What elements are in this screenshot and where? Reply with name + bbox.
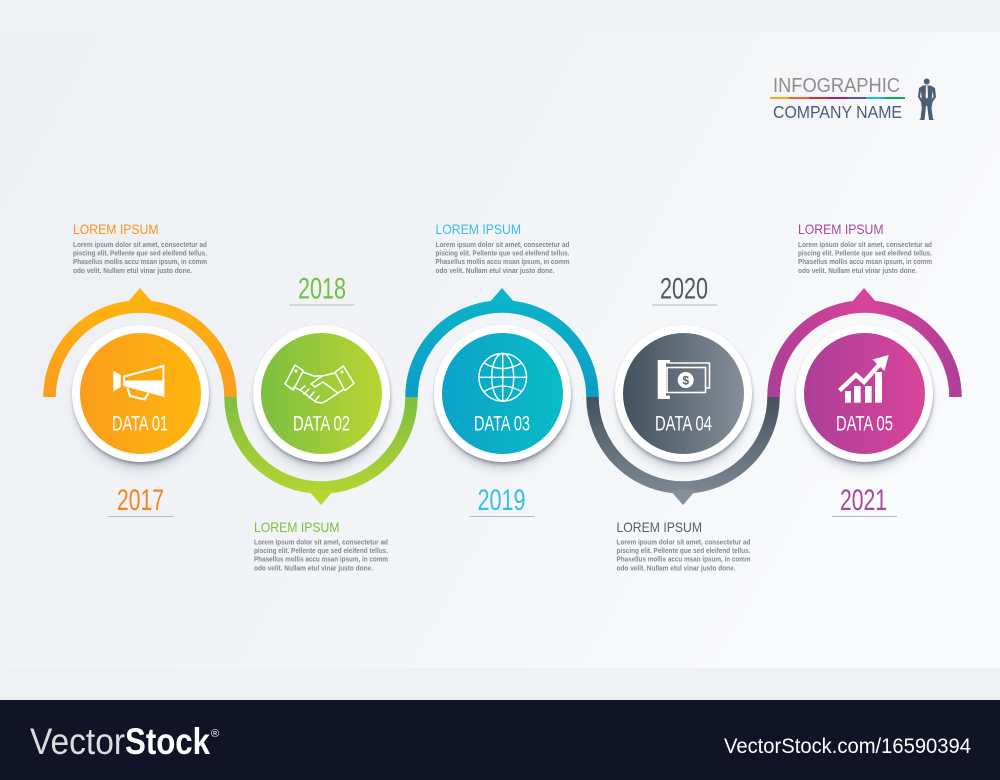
text block 4: Phasellus mollis accu msan ipsum, in comm bbox=[616, 555, 751, 564]
logo: infographic company name bbox=[770, 75, 905, 122]
text block 4: piscing elit. Pellente que sed eleifend tellus. bbox=[616, 546, 750, 555]
logo title: INFOGRAPHIC bbox=[773, 75, 900, 97]
icon: megaphone bbox=[113, 366, 164, 400]
text block 2: Lorem ipsum dolor sit amet, consectetur ad bbox=[254, 538, 388, 546]
footer logo: ® bbox=[211, 728, 219, 740]
label: DATA 05 bbox=[836, 412, 893, 436]
arc: blue bbox=[412, 288, 592, 397]
icon: growth chart bbox=[840, 355, 889, 403]
text block 5: LOREM IPSUM bbox=[798, 221, 884, 237]
text block 2: piscing elit. Pellente que sed eleifend tellus. bbox=[254, 546, 388, 555]
year 2020: 2020 bbox=[660, 272, 708, 306]
arc: orange bbox=[50, 288, 230, 397]
text block 3: odo velit. Nullam etul vinar justo done. bbox=[436, 266, 554, 275]
pointer bbox=[851, 288, 877, 303]
text block 1: Phasellus mollis accu msan ipsum, in comm bbox=[73, 257, 207, 266]
year 2021: 2021 bbox=[840, 484, 887, 517]
text block 4: odo velit. Nullam etul vinar justo done. bbox=[616, 563, 736, 572]
text block 1: LOREM IPSUM bbox=[73, 221, 158, 237]
icon: money bbox=[658, 360, 710, 399]
arc: green bbox=[230, 397, 412, 505]
text block 3: Lorem ipsum dolor sit amet, consectetur ad bbox=[436, 240, 570, 249]
text block 4: LOREM IPSUM bbox=[616, 519, 702, 535]
text block 1: odo velit. Nullam etul vinar justo done. bbox=[73, 266, 192, 275]
text block 2: LOREM IPSUM bbox=[254, 519, 340, 535]
node 2: green circle bbox=[253, 325, 390, 468]
footer logo: Stock bbox=[125, 721, 210, 762]
text block 2: odo velit. Nullam etul vinar justo done. bbox=[254, 563, 373, 572]
label: DATA 03 bbox=[474, 412, 530, 436]
rainbow divider bbox=[770, 97, 905, 99]
footer logo bbox=[30, 721, 219, 762]
label: DATA 04 bbox=[655, 412, 712, 436]
text block 1: piscing elit. Pellente que sed eleifend tellus. bbox=[73, 249, 207, 258]
text block 5: Phasellus mollis accu msan ipsum, in comm bbox=[798, 257, 932, 266]
year 2018: 2018 bbox=[298, 272, 346, 306]
text block 3: Phasellus mollis accu msan ipsum, in comm bbox=[436, 257, 570, 266]
text block 2: Phasellus mollis accu msan ipsum, in comm bbox=[254, 555, 388, 564]
icon: businessman bbox=[918, 78, 936, 120]
text block 3 bbox=[436, 221, 570, 275]
text block 5: piscing elit. Pellente que sed eleifend tellus. bbox=[798, 249, 932, 258]
text block 5: Lorem ipsum dolor sit amet, consectetur ad bbox=[798, 240, 932, 249]
pointer bbox=[127, 288, 153, 303]
icon: money: $ bbox=[682, 374, 689, 388]
node 4: gray circle bbox=[615, 325, 752, 468]
icon: handshake bbox=[285, 365, 354, 403]
company name: COMPANY NAME bbox=[773, 102, 902, 122]
text block 1 bbox=[73, 221, 207, 275]
text block 5: odo velit. Nullam etul vinar justo done. bbox=[798, 266, 917, 275]
text block 4 bbox=[616, 519, 751, 572]
pointer bbox=[670, 490, 696, 505]
node 3: blue circle bbox=[434, 325, 571, 468]
text block 1: Lorem ipsum dolor sit amet, consectetur ad bbox=[73, 240, 207, 249]
icon: globe bbox=[479, 354, 526, 401]
text block 4: Lorem ipsum dolor sit amet, consectetur ad bbox=[616, 538, 750, 546]
pointer bbox=[308, 490, 334, 505]
label: DATA 01 bbox=[112, 412, 168, 436]
text block 3: LOREM IPSUM bbox=[436, 221, 521, 237]
text block 5 bbox=[798, 221, 932, 275]
year 2017: 2017 bbox=[117, 484, 164, 517]
footer bar bbox=[0, 700, 1000, 780]
arc: magenta bbox=[774, 288, 956, 397]
text block 3: piscing elit. Pellente que sed eleifend tellus. bbox=[436, 249, 570, 258]
pointer bbox=[489, 288, 515, 303]
arc: gray bbox=[592, 397, 774, 505]
footer logo: Vector bbox=[30, 721, 125, 762]
year 2019: 2019 bbox=[478, 484, 526, 517]
text block 2 bbox=[254, 519, 388, 572]
node 1: orange circle bbox=[72, 325, 209, 468]
footer url: VectorStock.com/16590394 bbox=[724, 735, 971, 758]
node 5: magenta circle bbox=[796, 325, 933, 468]
label: DATA 02 bbox=[293, 412, 350, 436]
